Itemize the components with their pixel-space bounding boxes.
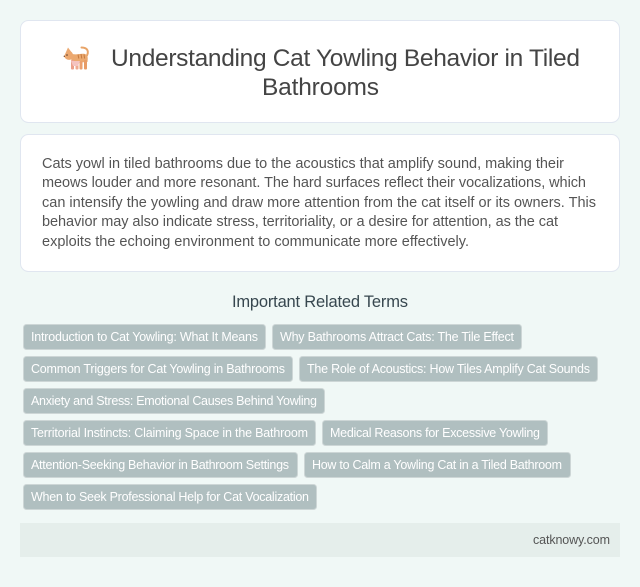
footer [20,523,620,557]
tag: How to Calm a Yowling Cat in a Tiled Bathroom [312,458,562,472]
title [111,45,580,101]
tag [24,452,298,478]
tag [300,356,598,382]
tag [322,420,548,446]
text block: description: can intensify the yowling and draw more attention from the cat itself or its owners. This [42,195,596,211]
tag: The Role of Acoustics: How Tiles Amplify Cat Sounds [307,362,590,376]
text block: description [42,156,596,250]
title: Bathrooms [262,74,379,101]
heading: related terms: Important Related Terms [232,293,408,311]
title: Understanding Cat Yowling Behavior in Tiled [111,45,580,72]
text block: description: behavior may also indicate stress, territoriality, or a desire for attention, as the cat [42,214,558,230]
tag: Common Triggers for Cat Yowling in Bathrooms [31,362,285,376]
tag: Medical Reasons for Excessive Yowling [330,426,540,440]
tag: When to Seek Professional Help for Cat Vocalization [31,490,309,504]
tag [24,356,292,382]
tag [24,324,266,350]
text block: description: exploits the echoing environment to communicate more effectively. [42,234,469,250]
tag [304,452,570,478]
icon: cat [64,48,88,70]
tag [272,324,522,350]
text block: description: meows louder and more resonant. The hard surfaces reflect their vocalizations, which [42,175,586,191]
tag [24,484,316,510]
tag: Attention-Seeking Behavior in Bathroom Settings [31,458,289,472]
panel: title card [20,20,620,122]
text block: description: Cats yowl in tiled bathrooms due to the acoustics that amplify sound, making their [42,156,564,172]
tag: Territorial Instincts: Claiming Space in the Bathroom [31,426,308,440]
panel: related term tags [24,324,598,510]
tag: Why Bathrooms Attract Cats: The Tile Effect [280,330,515,344]
tag [24,420,316,446]
panel: description card [20,134,620,272]
tag: Introduction to Cat Yowling: What It Means [31,330,258,344]
tag [24,388,324,414]
footer: catknowy.com [533,533,610,547]
tag: Anxiety and Stress: Emotional Causes Behind Yowling [31,394,317,408]
